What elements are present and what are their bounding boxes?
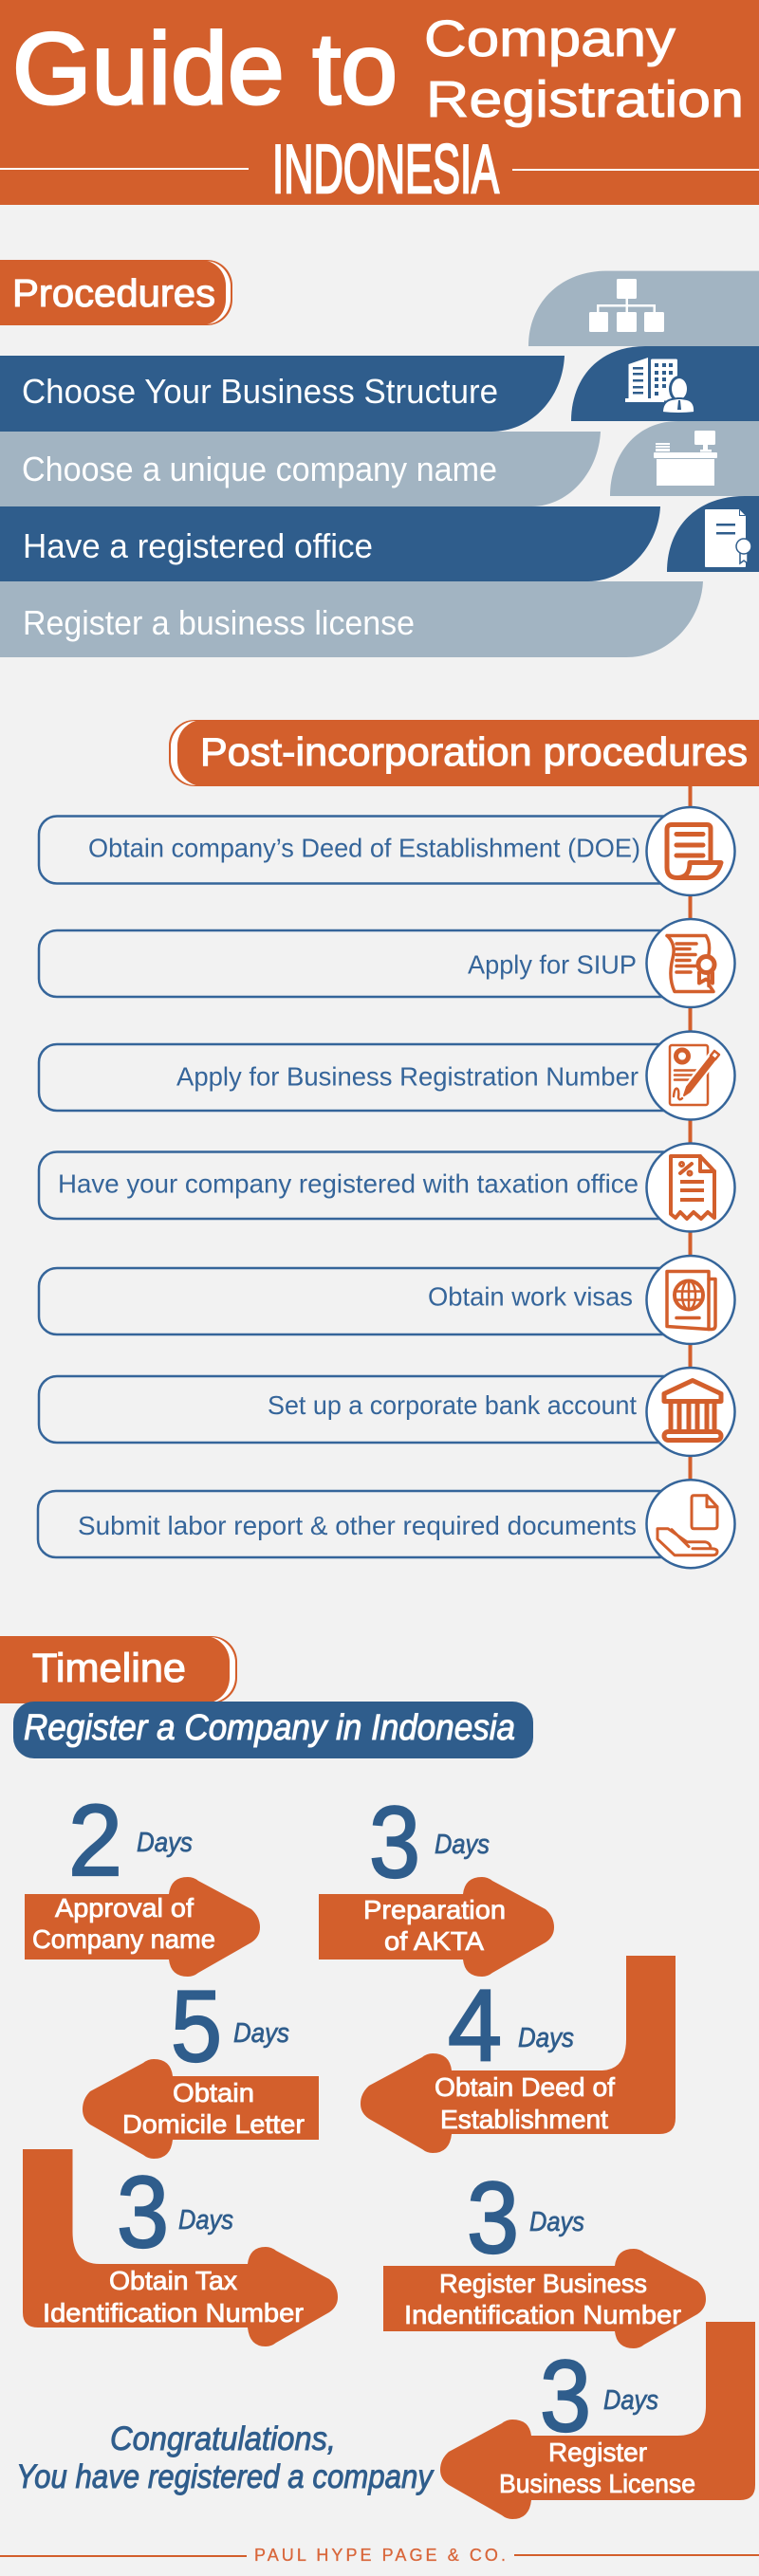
heading tab: Post-incorporation procedures [169,720,759,786]
icon: scroll [667,825,721,878]
timeline step 7: 3 days, Register Business License: Business License [499,2469,695,2498]
timeline step 3: 4 days, Obtain Deed of Establishment: Obtain Deed of [435,2072,615,2102]
step: Submit labor report and other required documents: Submit labor report & other required documents [78,1511,637,1540]
timeline step 2: 3 days, Preparation of AKTA: Preparation [363,1895,506,1924]
step: Apply for Business Registration Number [39,1032,734,1119]
subheading pill: Register a Company in Indonesia [13,1702,533,1758]
procedure step: Register a business license: Register a business license [23,603,415,642]
timeline step 4: 5 days, Obtain Domicile Letter: Days [233,2018,289,2049]
timeline step 1: 2 days, Approval of Company name [25,1783,260,1977]
step: Set up a corporate bank account: Set up a corporate bank account [268,1390,637,1420]
timeline step 3: 4 days, Obtain Deed of Establishment: Days [518,2023,574,2053]
timeline step 5: 3 days, Obtain Tax Identification Number: Days [178,2205,233,2236]
procedure step: Have a registered office [0,506,660,581]
closing message [16,2420,435,2495]
timeline step 5: 3 days, Obtain Tax Identification Number [23,2149,338,2346]
timeline step 5: 3 days, Obtain Tax Identification Number: Obtain Tax [109,2266,237,2295]
timeline step 1: 2 days, Approval of Company name: Approval of [55,1893,194,1923]
timeline step 5: 3 days, Obtain Tax Identification Number: 3 [117,2155,169,2269]
timeline step 2: 3 days, Preparation of AKTA [319,1785,554,1977]
panel: icon tab business building [571,346,759,421]
timeline step 1: 2 days, Approval of Company name: Company name [32,1924,215,1954]
icon: passport [667,1271,715,1330]
icon: hand holding document [657,1496,717,1555]
timeline step 2: 3 days, Preparation of AKTA: 3 [369,1785,420,1899]
timeline step 2: 3 days, Preparation of AKTA: Days [435,1830,490,1860]
timeline step 3: 4 days, Obtain Deed of Establishment: 4 [448,1968,502,2082]
icon: tax receipt [671,1156,714,1219]
step: Obtain work visas: Obtain work visas [428,1282,633,1311]
title: Guide to: Guide to [12,11,398,125]
timeline step 6: 3 days, Register Business Indentification Number: Days [529,2207,584,2237]
title: Registration: Registration [426,71,744,128]
procedure step: Choose a unique company name: Choose a unique company name [22,450,497,488]
timeline step 7: 3 days, Register Business License: Register [548,2438,647,2467]
timeline step 3: 4 days, Obtain Deed of Establishment: Establishment [440,2105,608,2134]
timeline step 6: 3 days, Register Business Indentification Number: Register Business [439,2269,647,2298]
step: Deed of Establishment: Obtain company’s Deed of Establishment (DOE) [88,833,640,863]
subheading pill: Register a Company in Indonesia: Register a Company in Indonesia [24,1708,515,1748]
step: Have your company registered with taxation office: Have your company registered with taxation office [58,1168,639,1199]
icon: office desk [654,431,717,486]
timeline step 1: 2 days, Approval of Company name: 2 [68,1783,122,1897]
heading tab: Timeline: Timeline [32,1646,186,1691]
step: Apply for SIUP [39,919,734,1007]
title: Company: Company [424,10,676,67]
icon: document with seal [705,509,751,567]
procedure step: Choose a unique company name [0,432,601,506]
closing message: Congratulations, [110,2420,336,2457]
icon: building with person [625,358,694,414]
title: Indonesia: INDONESIA [272,132,499,208]
panel: icon tab reception desk [610,421,759,496]
procedure step: Register a business license [0,581,703,657]
procedure step: Choose Your Business Structure [0,356,565,432]
icon: signed contract with pen [670,1045,719,1105]
timeline step 3: 4 days, Obtain Deed of Establishment [361,1956,676,2153]
panel: icon tab organisation structure [528,271,759,346]
step: Have your company registered with taxation office [39,1144,734,1231]
step: Apply for SIUP: Apply for SIUP [468,950,637,979]
timeline step 7: 3 days, Register Business License: 3 [540,2339,591,2453]
step: Submit labor report and other required documents [38,1480,734,1568]
timeline step 4: 5 days, Obtain Domicile Letter: Domicile Letter [122,2109,305,2139]
timeline step 6: 3 days, Register Business Indentification Number: 3 [467,2161,519,2274]
timeline step 7: 3 days, Register Business License: Days [603,2385,658,2416]
icon: certificate [667,935,714,992]
header banner [0,0,759,208]
step: Set up a corporate bank account [39,1368,734,1456]
timeline step 6: 3 days, Register Business Indentification Number [383,2161,706,2348]
heading tab: Procedures: Procedures [12,271,215,315]
icon: bank [664,1381,721,1440]
step: Deed of Establishment [39,807,734,895]
footer credit: PAUL HYPE PAGE & CO. [254,2546,506,2565]
closing message: You have registered a company [16,2458,435,2495]
procedure step: Have a registered office: Have a registered office [23,526,373,565]
timeline step 5: 3 days, Obtain Tax Identification Number: Identification Number [43,2298,304,2328]
heading tab: Post-incorporation procedures: Post-incorporation procedures [200,729,748,774]
timeline step 4: 5 days, Obtain Domicile Letter: 5 [171,1969,222,2083]
procedure step: Choose Your Business Structure: Choose Your Business Structure [22,372,498,411]
panel: icon tab certificate [667,496,759,572]
icon: org chart [589,279,664,332]
heading tab: Procedures [0,260,232,325]
step: Apply for Business Registration Number: Apply for Business Registration Number [176,1062,639,1091]
timeline step 1: 2 days, Approval of Company name: Days [137,1828,193,1858]
step: Obtain work visas [39,1256,734,1344]
timeline step 4: 5 days, Obtain Domicile Letter [83,1969,319,2159]
timeline step 6: 3 days, Register Business Indentification Number: Indentification Number [404,2300,681,2329]
timeline step 7: 3 days, Register Business License [440,2322,755,2519]
timeline step 4: 5 days, Obtain Domicile Letter: Obtain [173,2078,254,2107]
timeline step 2: 3 days, Preparation of AKTA: of AKTA [384,1926,484,1956]
heading tab: Timeline [0,1636,237,1703]
